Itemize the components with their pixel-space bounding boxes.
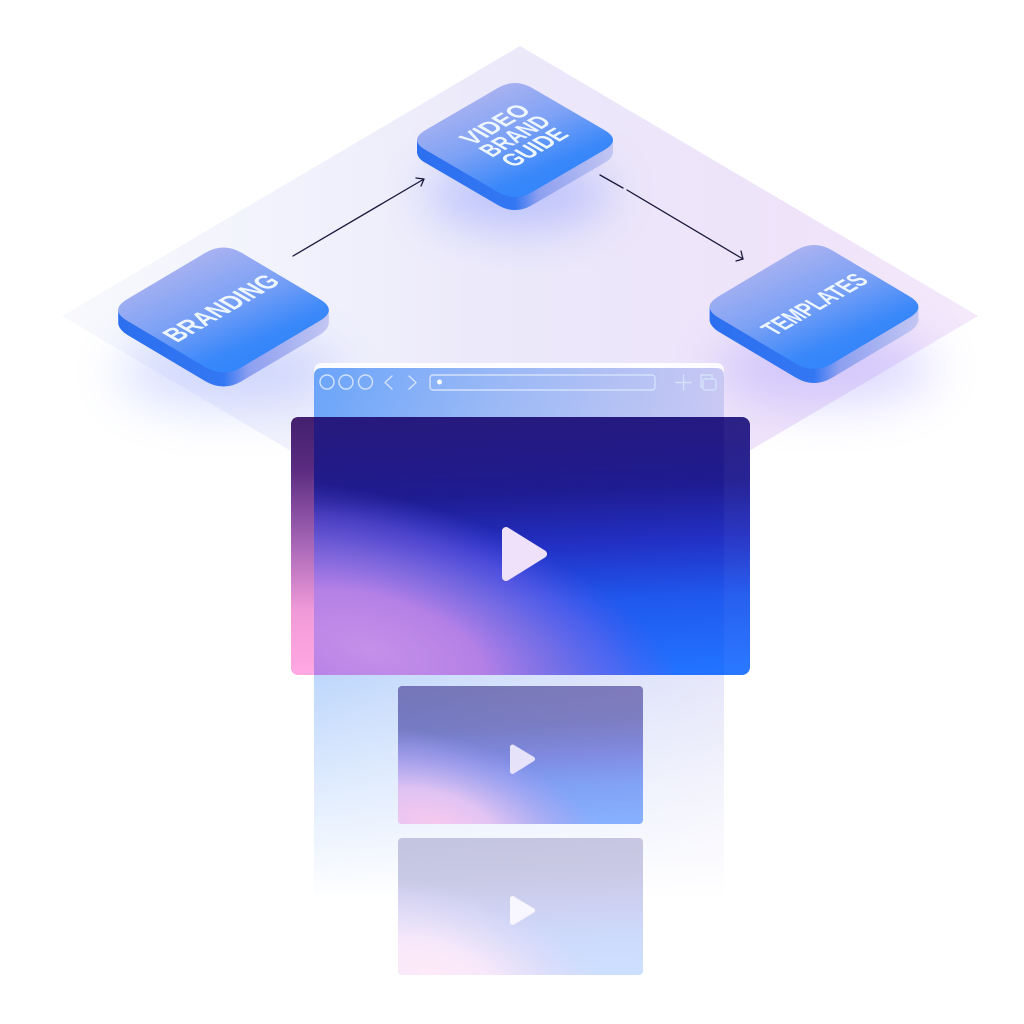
glow: templates tile <box>715 330 935 406</box>
play icon: thumbnail 2 <box>512 898 532 922</box>
video thumbnail 1 <box>398 686 643 824</box>
tile: branding <box>118 247 329 387</box>
glow: branding tile <box>118 334 338 410</box>
glow: video brand guide tile <box>426 160 610 228</box>
label: video brand guide <box>452 100 577 172</box>
arrow: video brand guide to templates <box>600 175 743 261</box>
play icon <box>506 531 543 577</box>
label: branding: BRANDING <box>156 271 287 346</box>
video thumbnail 2 <box>398 838 643 975</box>
browser window <box>314 363 724 900</box>
browser toolbar icons <box>320 375 716 390</box>
tile: video brand guide <box>417 83 613 210</box>
label: video brand guide: VIDEO <box>453 100 537 149</box>
arrow: branding to video brand guide <box>293 178 424 256</box>
label: video brand guide: GUIDE <box>494 124 575 171</box>
label: templates: TEMPLATES <box>755 270 876 340</box>
tile: templates <box>710 245 918 383</box>
play icon: thumbnail 1 <box>512 747 532 772</box>
isometric plane <box>62 46 978 586</box>
label: video brand guide: BRAND <box>472 111 557 160</box>
main video player <box>291 417 750 675</box>
